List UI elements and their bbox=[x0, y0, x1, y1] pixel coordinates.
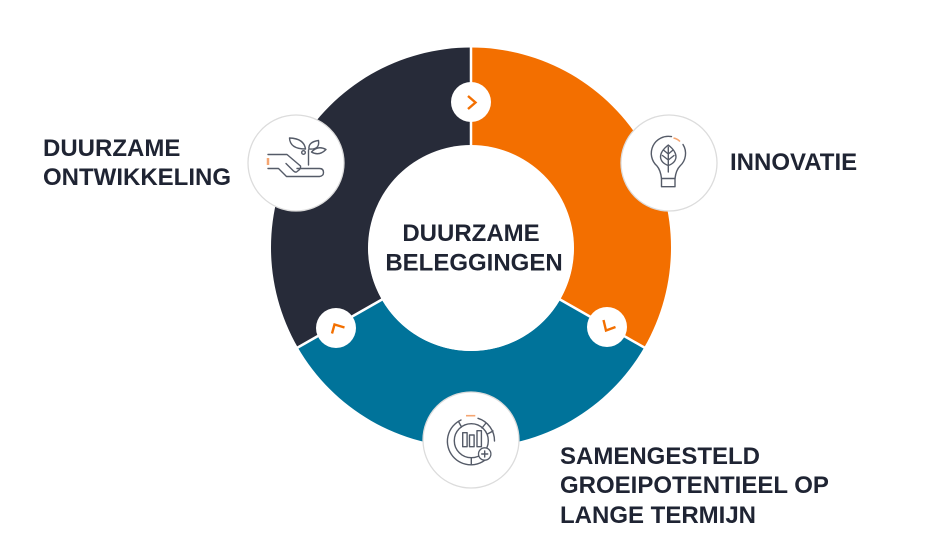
arrow: lower right bbox=[587, 307, 627, 347]
label: duurzame ontwikkeling: ONTWIKKELING bbox=[43, 164, 231, 191]
arrow: lower left bbox=[316, 308, 356, 348]
segment dividers bbox=[296, 45, 646, 348]
centre title: DUURZAME bbox=[402, 220, 540, 247]
segment: blue bbox=[298, 300, 644, 447]
label: samengesteld groeipotentieel: GROEIPOTENTIEEL OP bbox=[560, 472, 829, 499]
segment: orange bbox=[471, 48, 671, 348]
centre title: BELEGGINGEN bbox=[385, 250, 563, 276]
icon: light bulb with leaf bbox=[621, 115, 717, 211]
icon: chart dial with plus bbox=[423, 392, 519, 488]
label: samengesteld groeipotentieel: SAMENGESTELD bbox=[560, 443, 760, 470]
centre circle bbox=[368, 145, 574, 351]
label: samengesteld groeipotentieel: LANGE TERMIJN bbox=[560, 502, 756, 529]
icon: hand with plant bbox=[248, 115, 344, 211]
label: innovatie: INNOVATIE bbox=[730, 149, 857, 176]
label: duurzame ontwikkeling: DUURZAME bbox=[43, 135, 180, 162]
segment: dark navy bbox=[271, 48, 471, 348]
arrow: top bbox=[451, 82, 491, 122]
ring diagram bbox=[271, 45, 671, 447]
